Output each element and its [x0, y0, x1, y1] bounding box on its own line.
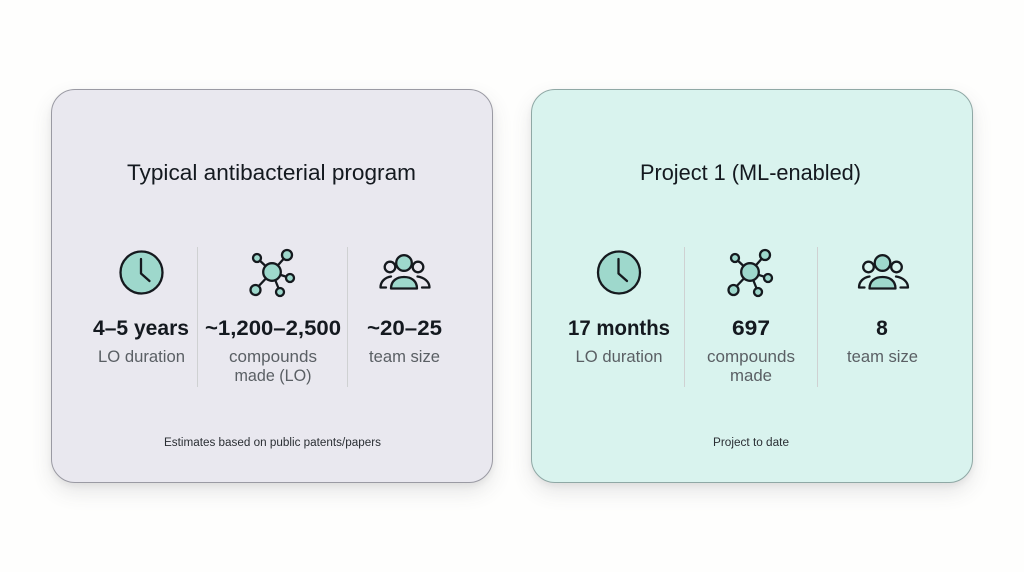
label: compounds made: [229, 348, 317, 385]
label: compounds made: compounds: [229, 348, 317, 366]
stat: team size value: ~20–25: [367, 317, 442, 340]
footnote: estimates: Estimates based on public patents/papers: [164, 437, 381, 449]
label: compounds made: made: [730, 367, 772, 385]
label: team size: team size: [369, 348, 440, 366]
label: LO duration: LO duration: [98, 348, 185, 366]
label: compounds made: [707, 348, 795, 385]
icon: clock: [598, 252, 640, 294]
heading: typical program: Typical antibacterial program: [127, 160, 416, 185]
icon: clock: [120, 252, 162, 294]
panel content: Project 1: [568, 160, 918, 449]
label: LO duration: LO duration: [576, 348, 662, 366]
stat: team size value: 8: [876, 317, 888, 340]
label: team size: team size: [847, 348, 918, 366]
stat: compounds value: ~1,200–2,500: [205, 317, 341, 340]
stat: compounds value: 697: [732, 317, 770, 340]
label: compounds made: made (LO): [234, 367, 312, 385]
icon: team: [859, 255, 908, 288]
panel content: typical antibacterial program: [93, 160, 442, 449]
icon: team: [380, 255, 430, 288]
stat: LO duration value: 17 months: [568, 317, 670, 340]
panel: Project 1 background: [531, 89, 973, 483]
stat: LO duration value: 4–5 years: [93, 317, 189, 340]
label: compounds made: compounds: [707, 348, 795, 366]
heading: Project 1: Project 1 (ML-enabled): [640, 160, 861, 185]
footnote: project to date: Project to date: [713, 437, 789, 449]
icon: molecule network: [728, 250, 772, 296]
panel: typical antibacterial program background: [51, 89, 493, 483]
icon: molecule network: [250, 250, 294, 296]
